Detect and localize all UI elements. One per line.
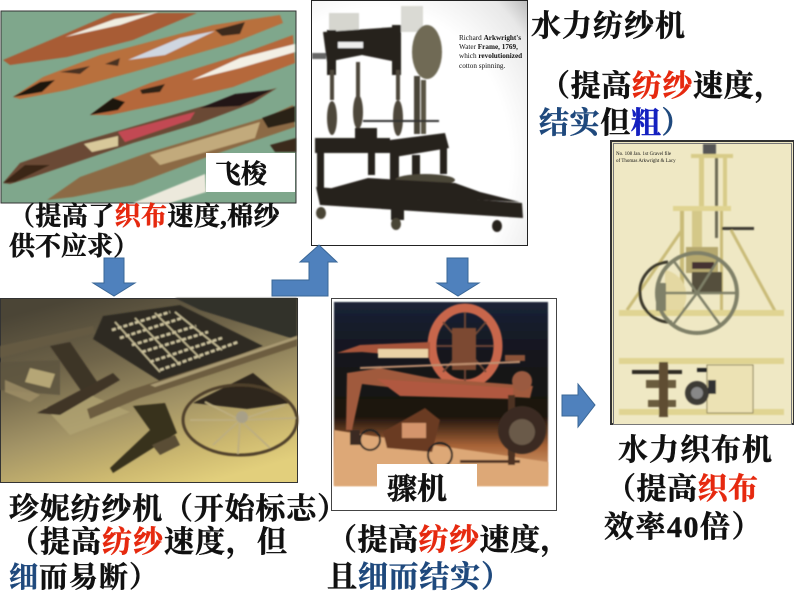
- heading: spinning jenny: [9, 493, 348, 594]
- caption: water frame effect: （提高纺纱速度，: [540, 69, 785, 104]
- caption on photograph: Richard Arkwright's: [459, 34, 521, 42]
- caption: power loom effect: 效率40倍）: [604, 511, 763, 544]
- caption: water frame effect: [539, 69, 785, 140]
- image: power loom drawing: of Thomas Arkwright & Lacy: [616, 159, 676, 164]
- heading: water frame: 水力纺纱机: [531, 10, 686, 43]
- arrow: shuttle to jenny: [93, 258, 135, 296]
- arrow: water frame to mule: [437, 258, 479, 296]
- caption: flying shuttle effect: 供不应求）: [9, 232, 139, 261]
- caption: spinning jenny effect: （提高纺纱速度，但: [9, 525, 288, 560]
- image: spinning mule: [332, 298, 556, 510]
- arrow: mule to power loom: [562, 384, 595, 427]
- caption: spinning jenny effect: [9, 525, 288, 594]
- caption: power loom effect: （提高织布: [606, 473, 758, 506]
- heading: power loom: [604, 434, 773, 544]
- caption: water frame effect: 结实但粗）: [539, 107, 692, 140]
- image: spinning jenny: [0, 298, 298, 482]
- arrow: jenny to water frame: [272, 245, 337, 296]
- image: flying shuttles: [1, 11, 296, 203]
- caption on photograph: Water Frame, 1769,: [459, 43, 518, 51]
- caption: flying shuttle effect: （提高了织布速度,棉纱: [9, 201, 282, 231]
- heading: spinning jenny: 珍妮纺纱机（开始标志）: [9, 493, 348, 526]
- label: spinning mule: 骤机: [387, 473, 447, 506]
- caption: spinning jenny effect: 细而易断）: [9, 561, 159, 594]
- heading: power loom: 水力织布机: [618, 434, 773, 467]
- caption: power loom effect: [604, 473, 763, 544]
- image: power loom drawing: No. 108 Jan. 1st Gravel file: [616, 152, 672, 157]
- caption on photograph: which revolutionized: [459, 52, 522, 60]
- image: power loom drawing: [611, 141, 794, 428]
- label: flying shuttle: [206, 153, 295, 192]
- heading: water frame: [531, 10, 785, 140]
- caption: spinning mule effect: （提高纺纱速度，: [327, 523, 571, 558]
- label: flying shuttle: 飞梭: [215, 159, 269, 189]
- caption: spinning mule effect: [327, 523, 571, 594]
- caption: spinning mule effect: 且细而结实）: [327, 561, 512, 594]
- caption on photograph: cotton spinning.: [459, 62, 506, 70]
- caption: flying shuttle effect: [9, 201, 282, 261]
- caption on photograph: [459, 34, 522, 70]
- label: spinning mule: [377, 464, 477, 506]
- image: water frame: [312, 0, 536, 246]
